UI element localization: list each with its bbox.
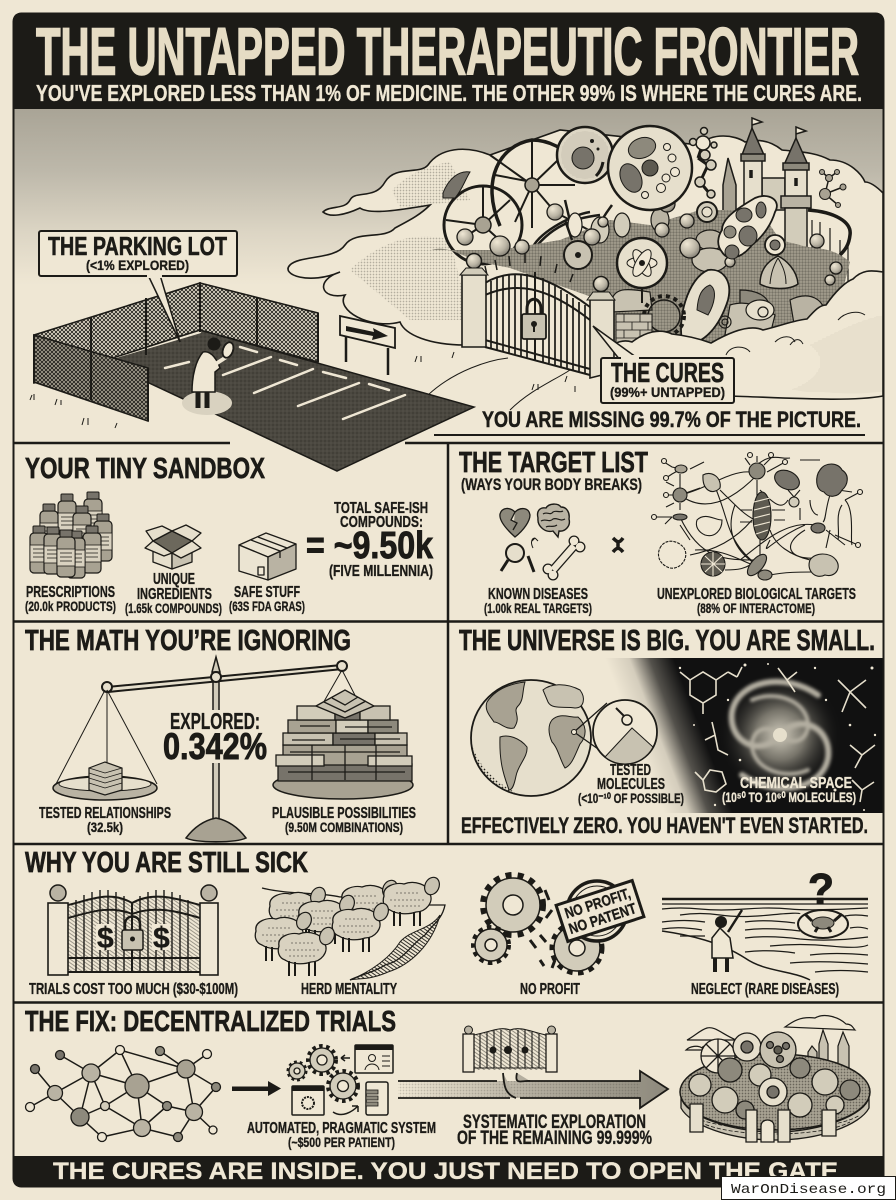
- label: safe stuff: [229, 584, 305, 614]
- label: known diseases: (1.00k REAL TARGETS): [484, 600, 592, 616]
- heading: why you are still sick: WHY YOU ARE STILL SICK: [25, 847, 308, 879]
- cell: right large: [608, 126, 692, 210]
- icon: multiply sign: [613, 538, 623, 552]
- left pan: [53, 776, 157, 800]
- icon: bone: [542, 536, 586, 580]
- scale base: [186, 818, 246, 842]
- heading: your tiny sandbox: YOUR TINY SANDBOX: [25, 453, 266, 485]
- gate: [460, 253, 615, 378]
- label: chemical space: [722, 775, 856, 805]
- illustration: walled city of cures: [680, 1016, 870, 1142]
- cloud: front right: [598, 271, 883, 399]
- icon: automated system: [288, 1045, 393, 1115]
- right chains: [322, 670, 360, 705]
- pivot and hook joints: [102, 661, 347, 692]
- brick wall: [616, 314, 652, 344]
- label: systematic exploration: [457, 1112, 652, 1149]
- heading: the math: THE MATH YOU’RE IGNORING: [25, 625, 351, 657]
- stat: explored percent: [160, 708, 270, 767]
- parking lot callout: [39, 231, 237, 342]
- parking lot callout: (<1% EXPLORED): [86, 257, 189, 273]
- label: prescriptions: (20.0k PRODUCTS): [25, 598, 116, 614]
- stat: total safe-ish compounds: [306, 500, 434, 580]
- icon: locked gate with dollars: $: [153, 922, 170, 955]
- direction sign: [340, 316, 395, 375]
- icon: broken heart: [500, 508, 530, 537]
- scientist with magnifier: [182, 338, 235, 415]
- dense mass of molecules and cells: [432, 196, 850, 345]
- panel: the fix: [25, 1006, 870, 1150]
- label: tested relationships: (32.5k): [87, 819, 123, 835]
- label: unique ingredients: UNIQUE: [153, 571, 195, 588]
- label: safe stuff: SAFE STUFF: [234, 584, 300, 601]
- structures: ferris wheels: [444, 140, 612, 264]
- parking lot callout: THE PARKING LOT: [48, 231, 227, 261]
- chart: balance scale: [53, 657, 413, 842]
- left chains: [56, 690, 157, 784]
- icon: bird statue: [443, 172, 470, 198]
- label: systematic exploration: OF THE REMAINING 99.999%: [457, 1128, 652, 1149]
- molecules in space: [680, 667, 875, 802]
- icon: small gate: [463, 1026, 557, 1072]
- label: tested molecules: MOLECULES: [597, 776, 665, 793]
- stars: [679, 663, 876, 811]
- label: no profit: NO PROFIT: [520, 981, 580, 998]
- book pile: [276, 690, 412, 781]
- cloud shading: [350, 162, 470, 320]
- label: plausible possibilities: (9.50M COMBINATIONS): [285, 819, 403, 835]
- label: known diseases: [484, 586, 592, 616]
- header banner: [13, 13, 884, 109]
- label: tested relationships: [39, 805, 171, 835]
- label: known diseases: KNOWN DISEASES: [488, 586, 588, 603]
- stat: total safe-ish compounds: (FIVE MILLENNIA): [329, 563, 433, 580]
- icon: prescription bottles: [30, 492, 112, 578]
- stamp: no profit no patent: NO PROFIT,: [563, 885, 633, 922]
- icon: open box: [145, 525, 201, 569]
- stamp: no profit no patent: [556, 881, 644, 941]
- label: unique ingredients: INGREDIENTS: [137, 586, 212, 603]
- network: biological targets: [652, 452, 862, 580]
- stat: explored percent: 0.342%: [163, 726, 267, 767]
- parking stripes: [105, 332, 405, 419]
- icon: locked gate with dollars: [48, 885, 218, 975]
- heading: the fix: THE FIX: DECENTRALIZED TRIALS: [25, 1006, 396, 1038]
- cloud lobes inner lines: [726, 312, 865, 355]
- parking lot asphalt: [100, 330, 474, 471]
- panel: hero scene: [14, 109, 883, 471]
- small gear: [644, 296, 684, 336]
- label: plausible possibilities: [272, 805, 416, 835]
- stat: total safe-ish compounds: TOTAL SAFE-ISH: [334, 500, 428, 517]
- icon: magnified tested molecules: [572, 700, 657, 764]
- watermark: WarOnDisease.org: [731, 1182, 886, 1198]
- panel: why you are still sick: [25, 847, 868, 998]
- ring wall: [808, 210, 850, 305]
- label: unique ingredients: (1.65k COMPOUNDS): [125, 600, 222, 616]
- frame and panel dividers: [13, 443, 884, 1002]
- label: tested molecules: TESTED: [610, 762, 651, 779]
- label: systematic exploration: SYSTEMATIC EXPLORATION: [463, 1112, 646, 1133]
- label: plausible possibilities: PLAUSIBLE POSSIBILITIES: [272, 805, 416, 822]
- grass tufts: [30, 352, 575, 428]
- scale beam: [107, 665, 343, 692]
- icon: sheep on a cliff: [255, 875, 445, 980]
- scale pole: [212, 657, 220, 820]
- label: automated system: (~$500 PER PATIENT): [288, 1134, 395, 1150]
- icon: magnifier: [501, 538, 538, 572]
- label: safe stuff: (63S FDA GRAS): [229, 598, 305, 614]
- panel: the universe is big: [459, 625, 883, 838]
- heading: the target list: (WAYS YOUR BODY BREAKS): [461, 475, 642, 494]
- chain-link fence: [34, 283, 318, 421]
- cloud shade front: [790, 315, 883, 393]
- stamp: no profit no patent: NO PATENT: [567, 900, 639, 938]
- footer banner: THE CURES ARE INSIDE. YOU JUST NEED TO OPEN THE GATE: [53, 1158, 838, 1185]
- label: unexplored biological targets: (88% OF INTERACTOME): [697, 600, 815, 616]
- right pan: [273, 771, 413, 799]
- icon: broken gears with stamp: [473, 875, 627, 973]
- cures callout: THE CURES: [611, 357, 724, 388]
- label: prescriptions: [25, 584, 116, 614]
- watermark: [722, 1176, 896, 1200]
- molecule upper: [690, 128, 717, 198]
- heading: the target list: [459, 447, 648, 494]
- label: unexplored biological targets: [657, 586, 856, 616]
- label: trials cost: TRIALS COST TOO MUCH ($30-$100M): [29, 981, 238, 998]
- label: herd mentality: HERD MENTALITY: [301, 981, 397, 998]
- ring molecule node: [697, 202, 717, 222]
- icon: brain: [538, 504, 569, 537]
- icon: sealed box: [239, 533, 296, 580]
- cures callout: [593, 326, 734, 403]
- label: tested molecules: (<10⁻¹⁰ OF POSSIBLE): [578, 790, 684, 806]
- molecule right: [820, 170, 846, 208]
- icon: neglected shore with lifebuoy: [662, 899, 868, 980]
- label: prescriptions: PRESCRIPTIONS: [26, 584, 115, 601]
- castle: [723, 118, 811, 248]
- cloud: main back bank: [288, 130, 883, 345]
- sky: [14, 109, 883, 441]
- cures callout: (99%+ UNTAPPED): [610, 384, 725, 400]
- curly cell: [681, 270, 729, 345]
- network diagram: [26, 1046, 220, 1142]
- panel: the target list: [459, 447, 862, 616]
- atom cell: [617, 238, 667, 303]
- chemical space background: [590, 658, 883, 813]
- label: tested relationships: TESTED RELATIONSHIPS: [39, 805, 171, 822]
- stat: total safe-ish compounds: = ~9.50k: [306, 525, 434, 567]
- label: chemical space: CHEMICAL SPACE: [740, 775, 852, 792]
- panel: your tiny sandbox: [25, 453, 434, 616]
- icon: earth: [471, 680, 591, 796]
- icon: locked gate with dollars: $: [97, 922, 114, 955]
- heading: the target list: THE TARGET LIST: [459, 447, 648, 479]
- node cell: [564, 220, 592, 269]
- label: automated system: AUTOMATED, PRAGMATIC SYSTEM: [247, 1120, 436, 1137]
- stat: total safe-ish compounds: COMPOUNDS:: [340, 514, 423, 531]
- galaxy: [718, 673, 842, 797]
- cell: left large: [557, 127, 613, 183]
- arrow: network to system: [232, 1081, 281, 1096]
- panel: the math you're ignoring: [25, 625, 416, 842]
- stat: explored percent: EXPLORED:: [170, 708, 260, 734]
- label: automated system: [247, 1120, 436, 1150]
- label: tested molecules: [578, 762, 684, 806]
- path to gate: [428, 358, 570, 410]
- label: unique ingredients: [125, 571, 222, 616]
- arrow: systematic exploration: [398, 1071, 668, 1108]
- icon: question mark: ?: [808, 865, 834, 914]
- paper stack: [89, 762, 122, 795]
